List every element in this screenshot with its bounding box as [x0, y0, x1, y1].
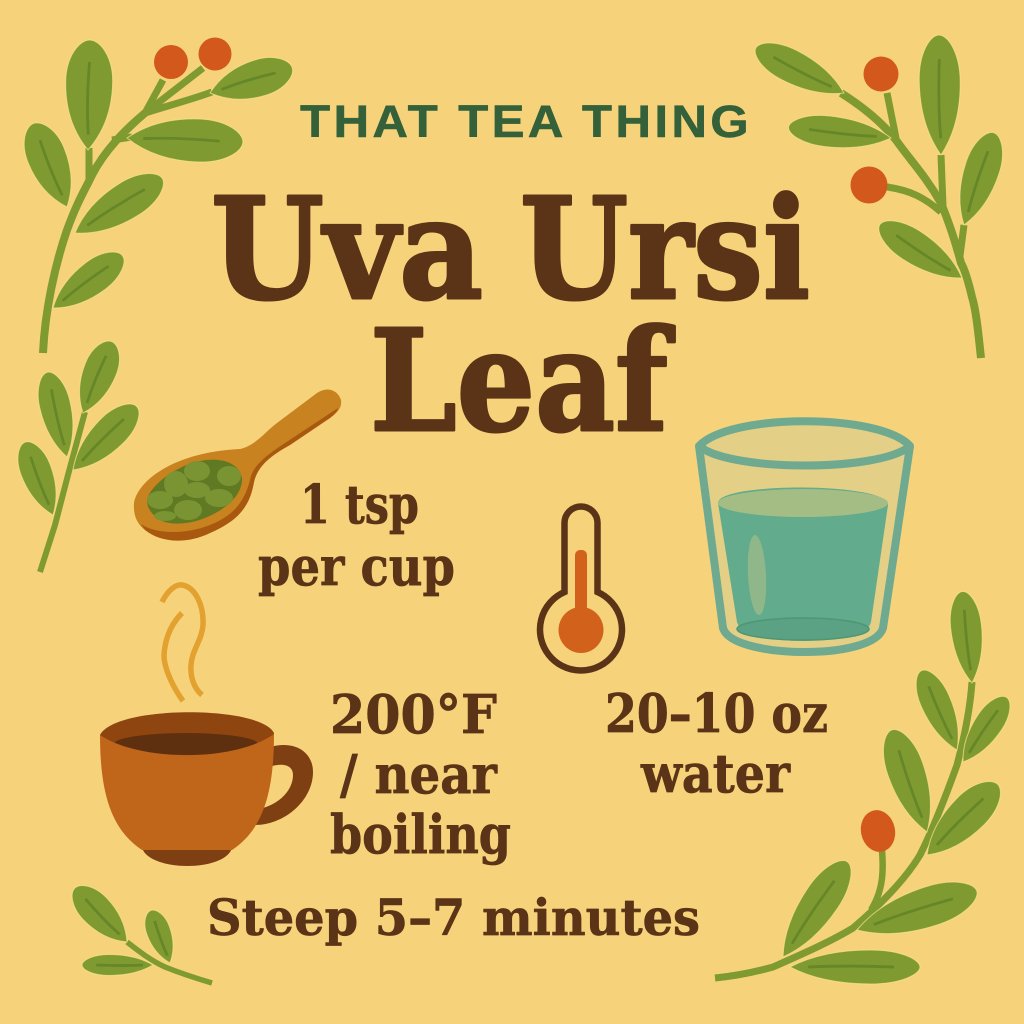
text: amount: per cup	[258, 536, 455, 598]
title	[211, 168, 810, 464]
icon: wooden spoon with leaves	[134, 389, 341, 541]
text: temperature	[330, 684, 511, 866]
text: amount: 1 tsp	[300, 474, 419, 536]
text: steep time: Steep 5–7 minutes	[207, 888, 700, 947]
text: water amount: 20–10 oz	[605, 683, 828, 745]
text: water amount	[605, 683, 828, 805]
text: amount	[258, 474, 455, 598]
brand heading: THAT TEA THING	[300, 96, 752, 147]
title: Leaf	[370, 300, 675, 464]
text: water amount: water	[640, 743, 791, 805]
icon: steam	[162, 585, 203, 701]
title: Uva	[211, 168, 483, 332]
branch: bottom right	[715, 590, 1018, 984]
text: temperature: / near	[340, 744, 498, 806]
branch: bottom left	[63, 877, 212, 983]
branch: middle left	[11, 335, 148, 572]
title: Ursi	[520, 168, 810, 332]
branch: top right	[748, 33, 1011, 358]
branch: top left	[15, 38, 298, 353]
text: temperature: boiling	[330, 804, 511, 866]
icon: tea cup	[100, 712, 313, 866]
text: temperature: 200°F	[330, 684, 497, 746]
icon: thermometer	[540, 506, 622, 671]
icon: glass of water	[699, 421, 910, 652]
